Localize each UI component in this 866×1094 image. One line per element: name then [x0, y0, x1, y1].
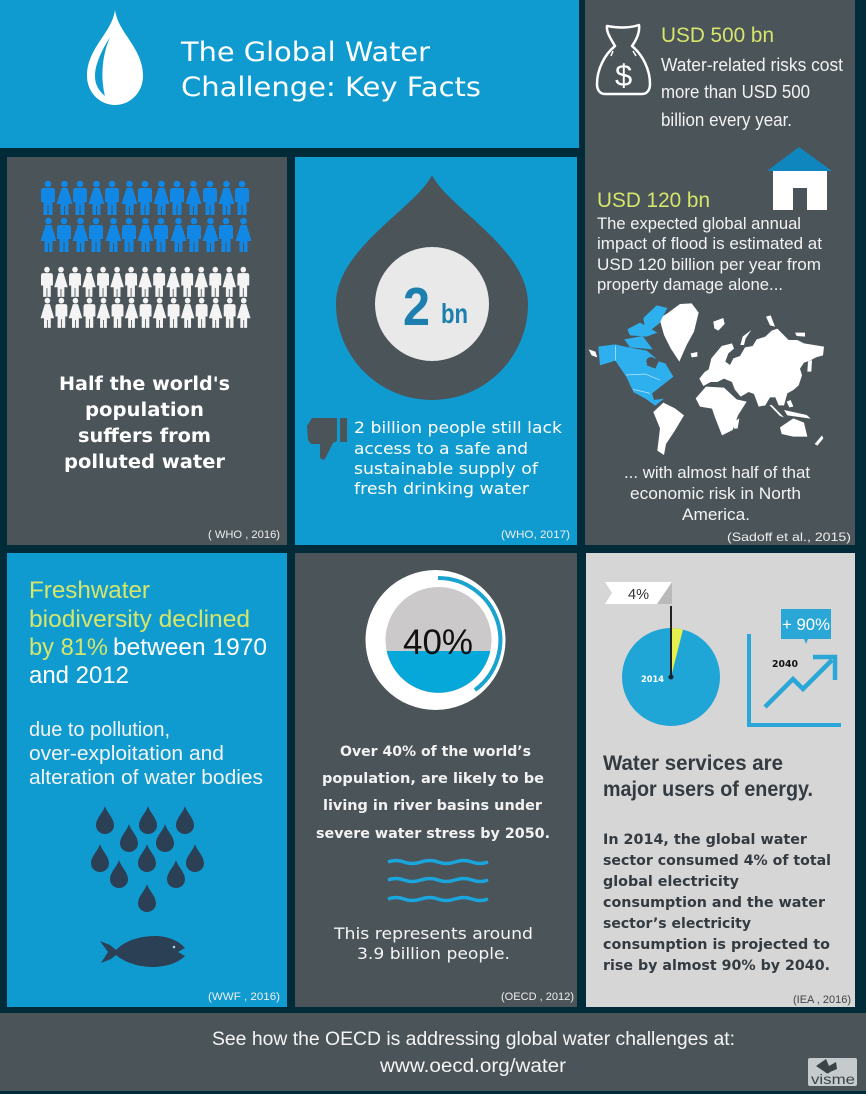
- icon: thumbs down: [307, 418, 347, 460]
- heading: biodiversity: by 81%: [29, 634, 108, 661]
- icon: money bag: $: [615, 58, 632, 93]
- text: North America share: economic risk in North: [630, 484, 801, 503]
- chart: 2014 pie: 2014: [641, 675, 664, 685]
- icon: big drop with 2 bn: [336, 175, 528, 400]
- text: North America share: America.: [682, 505, 750, 524]
- text: water risks: [661, 55, 843, 130]
- icon: fish: [100, 936, 185, 967]
- text: 2 billion people: fresh drinking water: [354, 479, 529, 498]
- heading: biodiversity: biodiversity declined: [29, 606, 250, 633]
- text: causes: over-exploitation and: [29, 743, 224, 765]
- icon: waves: [388, 860, 488, 900]
- panel: polluted water: [7, 157, 287, 545]
- chart: 2040 growth: [749, 609, 841, 725]
- text: causes: due to pollution,: [29, 719, 170, 741]
- text: 3.9 billion: [333, 924, 533, 963]
- heading: USD 500 bn: USD 500 bn: [661, 24, 774, 47]
- text: river basins: severe water stress by 2050.: [316, 826, 550, 842]
- heading: biodiversity: and 2012: [29, 662, 129, 689]
- panel: financial risks: [585, 0, 855, 545]
- chart: 40% gauge: 40%: [403, 623, 473, 662]
- text: energy consumption: consumption is projected to: [603, 937, 830, 953]
- text: 2 billion people: sustainable supply of: [354, 459, 538, 478]
- heading: biodiversity: [29, 577, 267, 689]
- heading: energy users: Water services are: [603, 752, 783, 775]
- text: half the world: [59, 374, 230, 473]
- chart: 2014 pie: 4%: [628, 586, 649, 603]
- text: call to action: See how the OECD is addressing global water challenges at:: [212, 1029, 735, 1050]
- text: river basins: living in river basins under: [323, 798, 543, 814]
- text: 2 billion people: [354, 418, 563, 498]
- source: (IEA , 2016): [793, 994, 851, 1006]
- text: water risks: Water-related risks cost: [661, 55, 843, 75]
- text: 2 billion people: access to a safe and: [354, 439, 528, 458]
- text: flood impact: impact of flood is estimated at: [597, 234, 822, 253]
- heading: USD 120 bn: USD 120 bn: [597, 189, 710, 212]
- panel: energy: [586, 553, 855, 1007]
- title: [180, 37, 481, 103]
- icon: house: [767, 147, 832, 210]
- text: river basins: [316, 744, 550, 842]
- text: call to action: www.oecd.org/water: [379, 1056, 567, 1077]
- chart: 2040 growth: 2040: [772, 659, 798, 670]
- text: energy consumption: sector’s electricity: [603, 916, 752, 932]
- panel: footer: [0, 1013, 866, 1091]
- heading: biodiversity: between 1970: [113, 634, 267, 661]
- text: flood impact: property damage alone...: [597, 275, 783, 294]
- text: energy consumption: rise by almost 90% by 2040.: [603, 958, 830, 974]
- icon: falling drops: [91, 806, 204, 912]
- source: (Sadoff et al., 2015): [727, 530, 851, 544]
- panel: 2 billion: [295, 157, 577, 545]
- logo: visme: [808, 1058, 857, 1087]
- text: flood impact: [597, 214, 822, 294]
- panel: water stress: [295, 553, 577, 1007]
- icon: big drop with 2 bn: bn: [441, 298, 468, 329]
- chart: 40% gauge: [366, 570, 506, 710]
- text: energy consumption: In 2014, the global water: [603, 832, 808, 848]
- text: water risks: billion every year.: [661, 110, 792, 130]
- source: (WWF , 2016): [208, 991, 280, 1003]
- text: 3.9 billion: This represents around: [333, 924, 533, 943]
- text: North America share: [624, 463, 810, 524]
- text: energy consumption: global electricity: [603, 874, 740, 890]
- text: energy consumption: [603, 832, 831, 974]
- text: half the world: suffers from: [78, 426, 211, 447]
- heading: biodiversity: Freshwater: [29, 577, 150, 604]
- text: half the world: Half the world's: [59, 374, 230, 395]
- text: energy consumption: sector consumed 4% of total: [603, 853, 831, 869]
- text: North America share: ... with almost half of that: [624, 463, 810, 482]
- text: half the world: polluted water: [64, 452, 226, 473]
- chart: 2014 pie: [605, 582, 720, 726]
- text: flood impact: The expected global annual: [597, 214, 801, 233]
- text: 3.9 billion: 3.9 billion people.: [357, 944, 510, 963]
- icon: big drop with 2 bn: 2: [403, 277, 430, 337]
- text: river basins: Over 40% of the world’s: [340, 744, 531, 760]
- world map: [588, 303, 824, 455]
- source: ( WHO , 2016): [208, 529, 280, 541]
- source: (WHO, 2017): [501, 529, 570, 541]
- icon: blue people: [40, 181, 252, 252]
- text: causes: alteration of water bodies: [29, 767, 263, 789]
- title: The Global Water: [180, 37, 431, 68]
- icon: white people: [41, 267, 251, 328]
- heading: energy users: major users of energy.: [603, 778, 813, 801]
- text: water risks: more than USD 500: [661, 82, 810, 102]
- icon: money bag: [597, 25, 650, 94]
- text: flood impact: USD 120 billion per year from: [597, 255, 821, 274]
- text: causes: [29, 719, 263, 789]
- chart: 2040 growth: + 90%: [782, 615, 830, 634]
- text: river basins: population, are likely to be: [322, 771, 544, 787]
- icon: water drop: [87, 10, 143, 105]
- title: Challenge: Key Facts: [181, 72, 481, 103]
- logo: visme: visme: [811, 1071, 855, 1087]
- text: call to action: [212, 1029, 735, 1077]
- source: (OECD , 2012): [501, 991, 574, 1003]
- heading: energy users: [603, 752, 813, 801]
- panel: freshwater biodiversity: [7, 553, 287, 1007]
- panel: header: [0, 0, 579, 148]
- text: 2 billion people: 2 billion people still lack: [354, 418, 563, 437]
- text: half the world: population: [85, 400, 204, 421]
- text: energy consumption: consumption and the water: [603, 895, 826, 911]
